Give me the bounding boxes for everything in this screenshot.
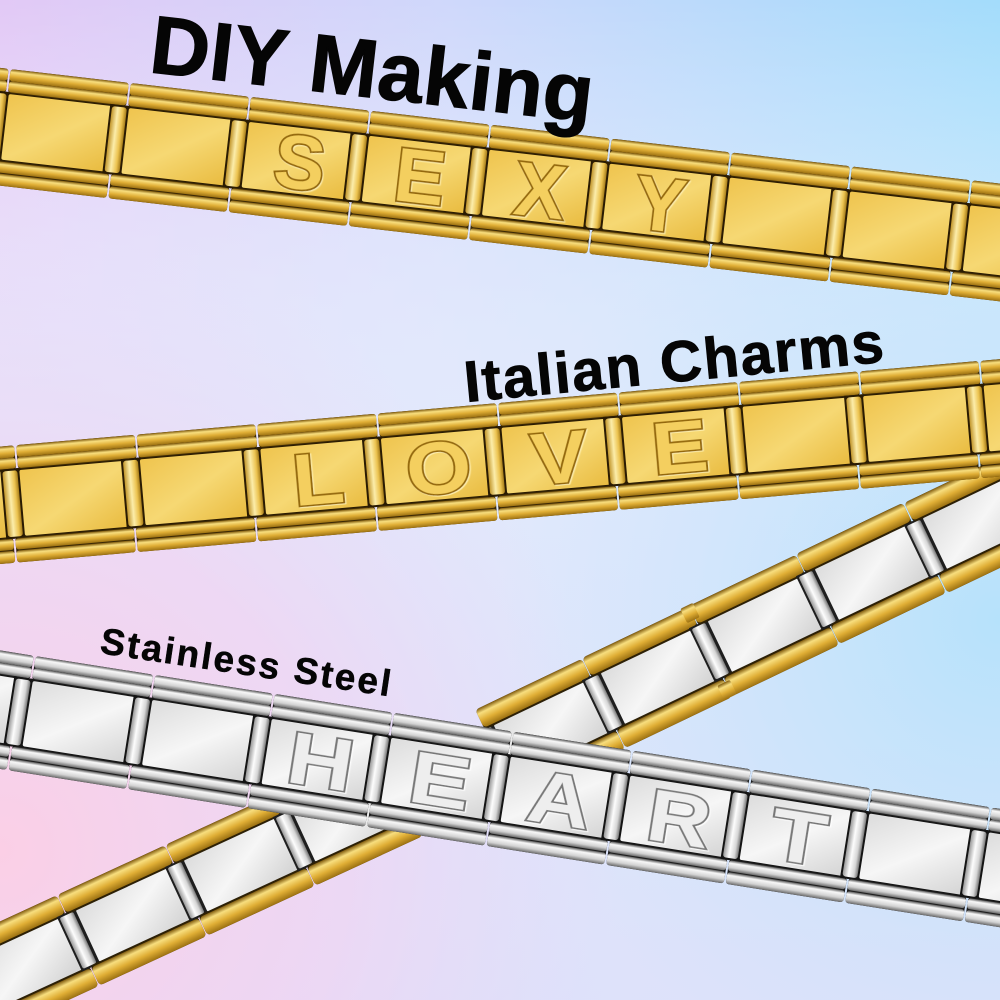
letter R: R xyxy=(642,774,717,865)
letter X: X xyxy=(510,146,570,236)
stainless steel HEART bracelet xyxy=(0,634,1000,942)
letter E: E xyxy=(390,132,450,223)
heading: Stainless Steel: Stainless Steel xyxy=(98,620,394,704)
letter O: O xyxy=(403,425,475,512)
letter S: S xyxy=(270,118,330,209)
letter T: T xyxy=(765,793,833,882)
letter E: E xyxy=(648,404,711,490)
heading: DIY Making: DIY Making xyxy=(146,0,598,140)
letter Y: Y xyxy=(630,160,690,250)
letter L: L xyxy=(289,436,347,522)
letter H: H xyxy=(282,717,360,808)
gold SEXY bracelet xyxy=(0,53,1000,311)
gold LOVE bracelet xyxy=(0,350,1000,574)
diagonal two-tone gold and silver bracelet xyxy=(0,452,1000,1000)
heading: Italian Charms: Italian Charms xyxy=(461,310,886,415)
letter V: V xyxy=(528,415,591,501)
letter E: E xyxy=(404,736,477,826)
letter A: A xyxy=(522,755,597,846)
